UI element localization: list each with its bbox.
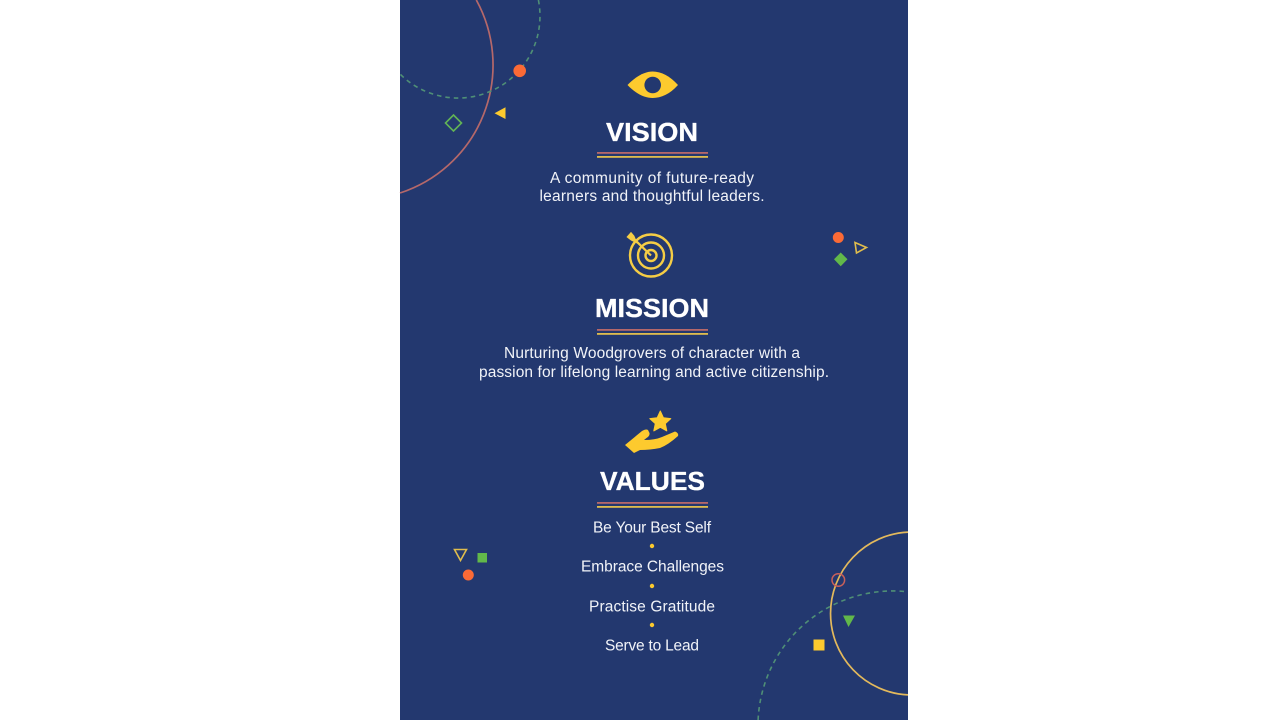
bottom-right decorative circles and shapes bbox=[758, 532, 908, 720]
list: values: Be Your Best Self bbox=[593, 520, 712, 536]
list: values bbox=[581, 520, 724, 654]
heading: mission bbox=[595, 293, 709, 335]
list: values: Embrace Challenges bbox=[581, 558, 724, 576]
text: vision statement bbox=[540, 170, 764, 205]
list: values: Practise Gratitude bbox=[589, 598, 715, 616]
text: vision statement: learners and thoughtful leaders. bbox=[540, 188, 764, 205]
text: mission statement: passion for lifelong learning and active citizenship. bbox=[479, 364, 829, 381]
icon: target with arrow bbox=[627, 232, 672, 276]
heading: values bbox=[597, 466, 708, 508]
text: vision statement: A community of future-ready bbox=[550, 170, 754, 187]
heading: values: VALUES bbox=[600, 466, 705, 496]
panel: navy poster background bbox=[400, 0, 908, 720]
heading: mission: MISSION bbox=[595, 293, 709, 323]
right-side shape cluster bbox=[833, 232, 866, 266]
left-side shape cluster bbox=[454, 550, 487, 580]
icon: eye bbox=[628, 72, 678, 98]
top-left decorative circles and shapes bbox=[400, 0, 540, 193]
heading: vision: VISION bbox=[606, 117, 698, 147]
text: mission statement bbox=[479, 345, 829, 381]
heading: vision bbox=[597, 117, 708, 158]
list: values: Serve to Lead bbox=[605, 638, 699, 654]
icon: hand holding star bbox=[625, 411, 678, 453]
text: mission statement: Nurturing Woodgrovers of character with a bbox=[504, 345, 800, 362]
